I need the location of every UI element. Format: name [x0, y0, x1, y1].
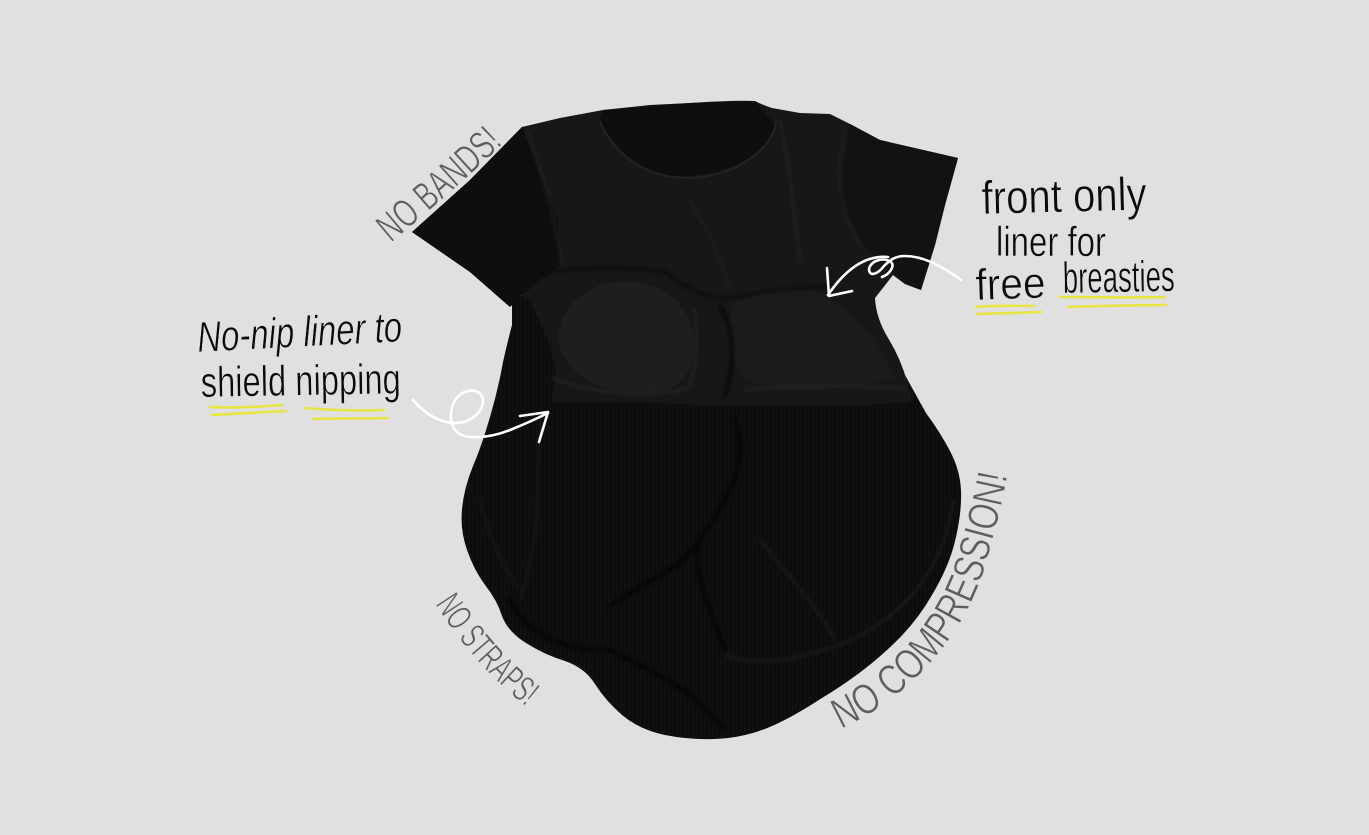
collar inner ribbed back: [600, 101, 775, 176]
callout: front only liner: [827, 167, 1175, 314]
right cup liner: [729, 288, 895, 390]
hem seam and folds: [480, 420, 953, 728]
callout text line 3: free: free: [975, 259, 1046, 310]
photo: black shirt with liner: [412, 101, 961, 739]
yellow underlines: free breasties: [976, 297, 1166, 314]
arrow pointing to front liner: [827, 256, 961, 296]
left sleeve shade: [412, 127, 560, 307]
left cup liner: [558, 281, 695, 393]
right sleeve shade: [838, 124, 958, 290]
callout text line 1: front only: [981, 167, 1148, 224]
callout text line 2: liner for: [996, 218, 1106, 265]
shirt top layer: sleeves and front: [412, 101, 958, 406]
callout text line 2: shield nipping: [200, 356, 401, 407]
label: no straps: NO STRAPS!: [436, 592, 540, 705]
liner band and seams: [528, 120, 905, 395]
label: no bands: NO BANDS!: [375, 126, 501, 242]
label: no compression: NO COMPRESSION!: [830, 472, 1007, 728]
arrow pointing to hem of liner: [413, 391, 548, 442]
callout text line 3: breasties: breasties: [1062, 252, 1175, 303]
callout: no-nip liner: [196, 303, 548, 442]
shirt bottom layer: ribbed long hem: [462, 260, 961, 739]
callout text line 1: No-nip liner to: [196, 303, 403, 362]
yellow underlines: shield nipping: [210, 405, 388, 419]
collar edge: [600, 122, 776, 178]
